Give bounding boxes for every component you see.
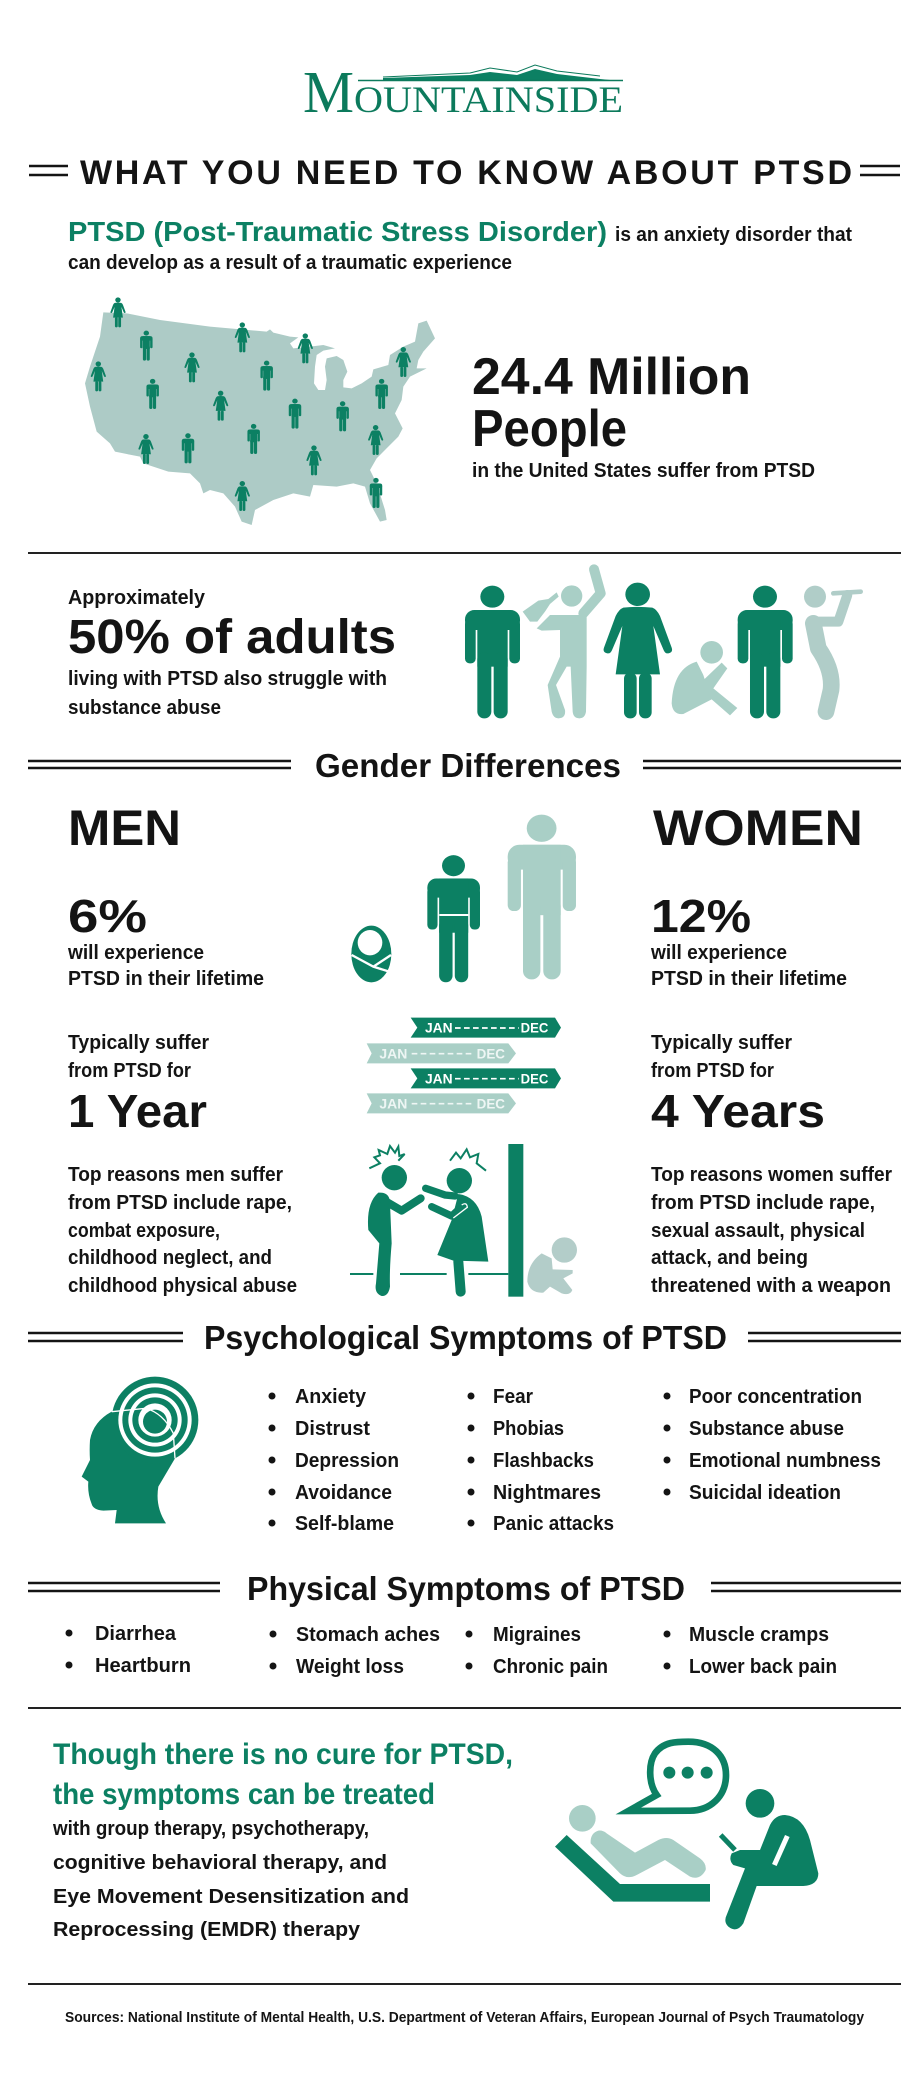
list: physical symptoms: Migraines	[493, 1624, 581, 1646]
panel: women: from PTSD include rape,	[651, 1192, 875, 1214]
list: psychological symptoms column 1: Distrust	[295, 1418, 370, 1440]
statistic: 50% of adults: substance abuse	[68, 697, 221, 719]
statistic: 50% of adults: living with PTSD also struggle with	[68, 668, 387, 690]
panel: men: MEN	[68, 800, 181, 856]
icon: calendar ribbons: JAN	[379, 1045, 407, 1061]
statistic: 50% of adults	[68, 587, 396, 719]
list: psychological symptoms column 3: Suicidal ideation	[689, 1482, 841, 1504]
heading: physical symptoms: Physical Symptoms of PTSD	[247, 1570, 685, 1607]
icon: calendar ribbons: DEC	[477, 1045, 505, 1061]
treatment text: Though there is no cure for PTSD,	[53, 1738, 513, 1771]
panel: women: Top reasons women suffer	[651, 1164, 892, 1186]
icon: calendar ribbons: JAN	[379, 1095, 407, 1111]
map of the United States with people	[85, 297, 435, 525]
list: psychological symptoms column 2: Nightmares	[493, 1482, 601, 1504]
icon: baby, child and adult	[351, 815, 576, 982]
logo: Mountainside	[303, 59, 623, 125]
title: WHAT YOU NEED TO KNOW ABOUT PTSD	[80, 154, 852, 192]
panel: women	[650, 800, 892, 1297]
panel: men: from PTSD include rape,	[68, 1192, 292, 1214]
list: psychological symptoms column 2: Panic attacks	[493, 1513, 614, 1535]
logo: Mountainside: OUNTAINSIDE	[354, 80, 623, 121]
list: physical symptoms: Muscle cramps	[689, 1624, 829, 1646]
panel: men: 1 Year	[68, 1085, 207, 1137]
icon: calendar ribbons: DEC	[521, 1070, 548, 1086]
panel: women: PTSD in their lifetime	[651, 968, 847, 990]
icon: calendar ribbons: DEC	[477, 1095, 505, 1111]
panel: men: childhood physical abuse	[68, 1275, 297, 1297]
panel: women: attack, and being	[651, 1247, 808, 1269]
heading: psychological symptoms: Psychological Symptoms of PTSD	[204, 1319, 727, 1356]
intro text: can develop as a result of a traumatic experience	[68, 252, 512, 274]
list: physical symptoms: Chronic pain	[493, 1656, 608, 1678]
panel: men: PTSD in their lifetime	[68, 968, 264, 990]
list: psychological symptoms column 2	[468, 1386, 614, 1535]
intro text	[68, 216, 852, 274]
treatment text: with group therapy, psychotherapy,	[52, 1818, 369, 1840]
panel: women: threatened with a weapon	[651, 1275, 891, 1297]
panel: men: 6%	[68, 890, 147, 942]
icon: calendar ribbons	[367, 1018, 561, 1113]
list: psychological symptoms column 1: Anxiety	[295, 1386, 367, 1408]
list: psychological symptoms column 3: Substance abuse	[689, 1418, 844, 1440]
list: psychological symptoms column 1: Depression	[295, 1450, 399, 1472]
treatment text: Eye Movement Desensitization and	[53, 1886, 409, 1908]
statistic: 24.4 million people: People	[472, 400, 627, 458]
intro text: PTSD (Post-Traumatic Stress Disorder)	[68, 216, 607, 247]
list: psychological symptoms column 2: Flashbacks	[493, 1450, 594, 1472]
panel: men: Top reasons men suffer	[68, 1164, 283, 1186]
icon: calendar ribbons: DEC	[521, 1020, 548, 1036]
panel: women: WOMEN	[653, 800, 863, 856]
statistic: 24.4 million people: 24.4 Million	[472, 348, 751, 406]
panel: men	[67, 800, 297, 1297]
statistic: 24.4 million people	[472, 348, 815, 482]
icon: therapy session	[555, 1742, 818, 1929]
heading: gender differences: Gender Differences	[315, 747, 621, 784]
list: psychological symptoms column 2: Fear	[493, 1386, 533, 1408]
treatment text: Reprocessing (EMDR) therapy	[53, 1919, 361, 1941]
logo: Mountainside: M	[303, 59, 354, 125]
list: physical symptoms: Diarrhea	[95, 1623, 177, 1645]
panel: men: from PTSD for	[68, 1060, 191, 1082]
list: physical symptoms: Heartburn	[95, 1655, 191, 1677]
list: psychological symptoms column 1: Self-blame	[295, 1513, 394, 1535]
list: physical symptoms	[66, 1623, 837, 1678]
treatment text: cognitive behavioral therapy, and	[53, 1852, 387, 1874]
intro text: is an anxiety disorder that	[615, 224, 852, 246]
sources: Sources: National Institute of Mental Health, U.S. Department of Veteran Affairs, European Journal of Psych Traumatology	[65, 2009, 865, 2026]
icon: calendar ribbons: JAN	[425, 1020, 453, 1036]
treatment text	[52, 1738, 513, 1941]
panel: women: Typically suffer	[651, 1032, 792, 1054]
list: physical symptoms: Stomach aches	[296, 1624, 440, 1646]
panel: men: combat exposure,	[68, 1220, 220, 1242]
list: psychological symptoms column 2: Phobias	[493, 1418, 564, 1440]
panel: women: from PTSD for	[651, 1060, 774, 1082]
panel: women: 4 Years	[651, 1085, 825, 1137]
list: psychological symptoms column 3: Emotional numbness	[689, 1450, 881, 1472]
panel: women: sexual assault, physical	[651, 1220, 865, 1242]
panel: women: will experience	[650, 942, 787, 964]
list: psychological symptoms column 1: Avoidance	[295, 1482, 392, 1504]
panel: men: childhood neglect, and	[68, 1247, 272, 1269]
list: psychological symptoms column 3: Poor concentration	[689, 1386, 862, 1408]
statistic: 24.4 million people: in the United States suffer from PTSD	[472, 460, 815, 482]
icon: head with concentric rings	[82, 1377, 198, 1523]
icon: calendar ribbons: JAN	[425, 1070, 453, 1086]
icon: arguing couple and child behind wall	[350, 1144, 577, 1297]
list: physical symptoms: Lower back pain	[689, 1656, 837, 1678]
list: psychological symptoms column 3	[664, 1386, 881, 1504]
list: psychological symptoms column 1	[268, 1386, 399, 1535]
statistic: 50% of adults: Approximately	[68, 587, 206, 609]
list: physical symptoms: Weight loss	[296, 1656, 404, 1678]
panel: men: Typically suffer	[68, 1032, 209, 1054]
panel: women: 12%	[651, 890, 751, 942]
panel: men: will experience	[67, 942, 204, 964]
statistic: 50% of adults: 50% of adults	[68, 611, 396, 664]
treatment text: the symptoms can be treated	[53, 1778, 435, 1811]
icon: people with substance abuse	[465, 569, 861, 718]
